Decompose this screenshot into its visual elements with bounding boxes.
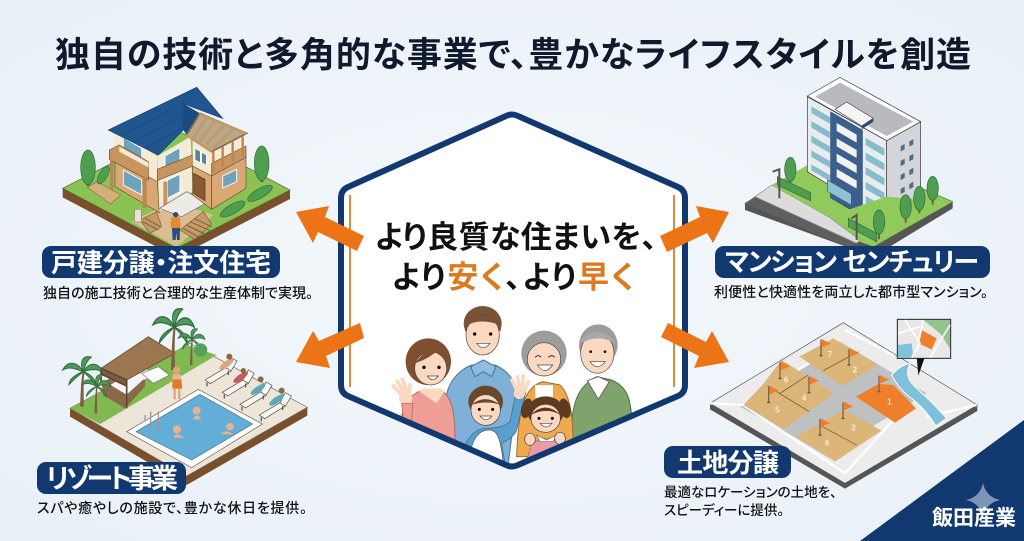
illustration: land plots with flags and map: 6 — [825, 438, 830, 447]
label: マンション センチュリー: マンション センチュリー — [725, 247, 979, 277]
illustration: land plots with flags and map: 1 — [887, 398, 892, 407]
description: スピーディーに提供。 — [664, 502, 784, 518]
arrow: to condominium — [660, 206, 729, 252]
central message: より良質な住まいを、 — [375, 220, 657, 255]
panel: detached housing — [42, 87, 313, 301]
hexagon frame fill — [341, 114, 685, 466]
inner orange rules — [350, 195, 674, 387]
map inset — [897, 319, 951, 376]
panel: land subdivision — [664, 319, 977, 518]
hexagon outline — [341, 114, 685, 466]
central message — [375, 220, 657, 295]
description: 最適なロケーションの土地を、 — [664, 484, 837, 500]
illustration: land plots with flags and map — [710, 319, 977, 489]
illustration: apartment building — [745, 77, 953, 257]
title: 独自の技術と多角的な事業で、豊かなライフスタイルを創造 — [55, 36, 971, 75]
arrow: to resort — [296, 323, 364, 368]
corner badge: 飯田産業: 飯田産業 — [932, 507, 1016, 530]
arrow: to land — [661, 323, 729, 368]
illustration: land plots with flags and map: 2 — [853, 365, 858, 374]
illustration: land plots with flags and map: 3 — [851, 423, 856, 432]
corner badge: 飯田産業 — [860, 420, 1024, 541]
panel: central hexagon — [341, 114, 685, 466]
description: スパや癒やしの施設で、豊かな休日を提供。 — [37, 500, 307, 516]
panel: condominium — [714, 77, 990, 300]
illustration: house on isometric plot — [63, 87, 290, 257]
label: 戸建分譲・注文住宅: 戸建分譲・注文住宅 — [51, 248, 271, 278]
arrow: to detached housing — [296, 206, 364, 251]
illustration: resort pool — [63, 309, 307, 485]
central message: より安く、より早く — [392, 260, 634, 295]
illustration: land plots with flags and map: 6 — [784, 375, 789, 384]
illustration: land plots with flags and map: 7 — [828, 350, 833, 359]
illustration: land plots with flags and map: 4 — [802, 393, 807, 402]
illustration: three-generation family — [393, 306, 632, 463]
label: 土地分譲: 土地分譲 — [677, 448, 779, 478]
description: 独自の施工技術と合理的な生産体制で実現。 — [43, 285, 313, 301]
label: リゾート事業: リゾート事業 — [46, 464, 178, 494]
description: 利便性と快適性を両立した都市型マンション。 — [714, 284, 988, 300]
panel: resort business — [37, 309, 307, 516]
illustration: land plots with flags and map: 5 — [775, 405, 780, 414]
